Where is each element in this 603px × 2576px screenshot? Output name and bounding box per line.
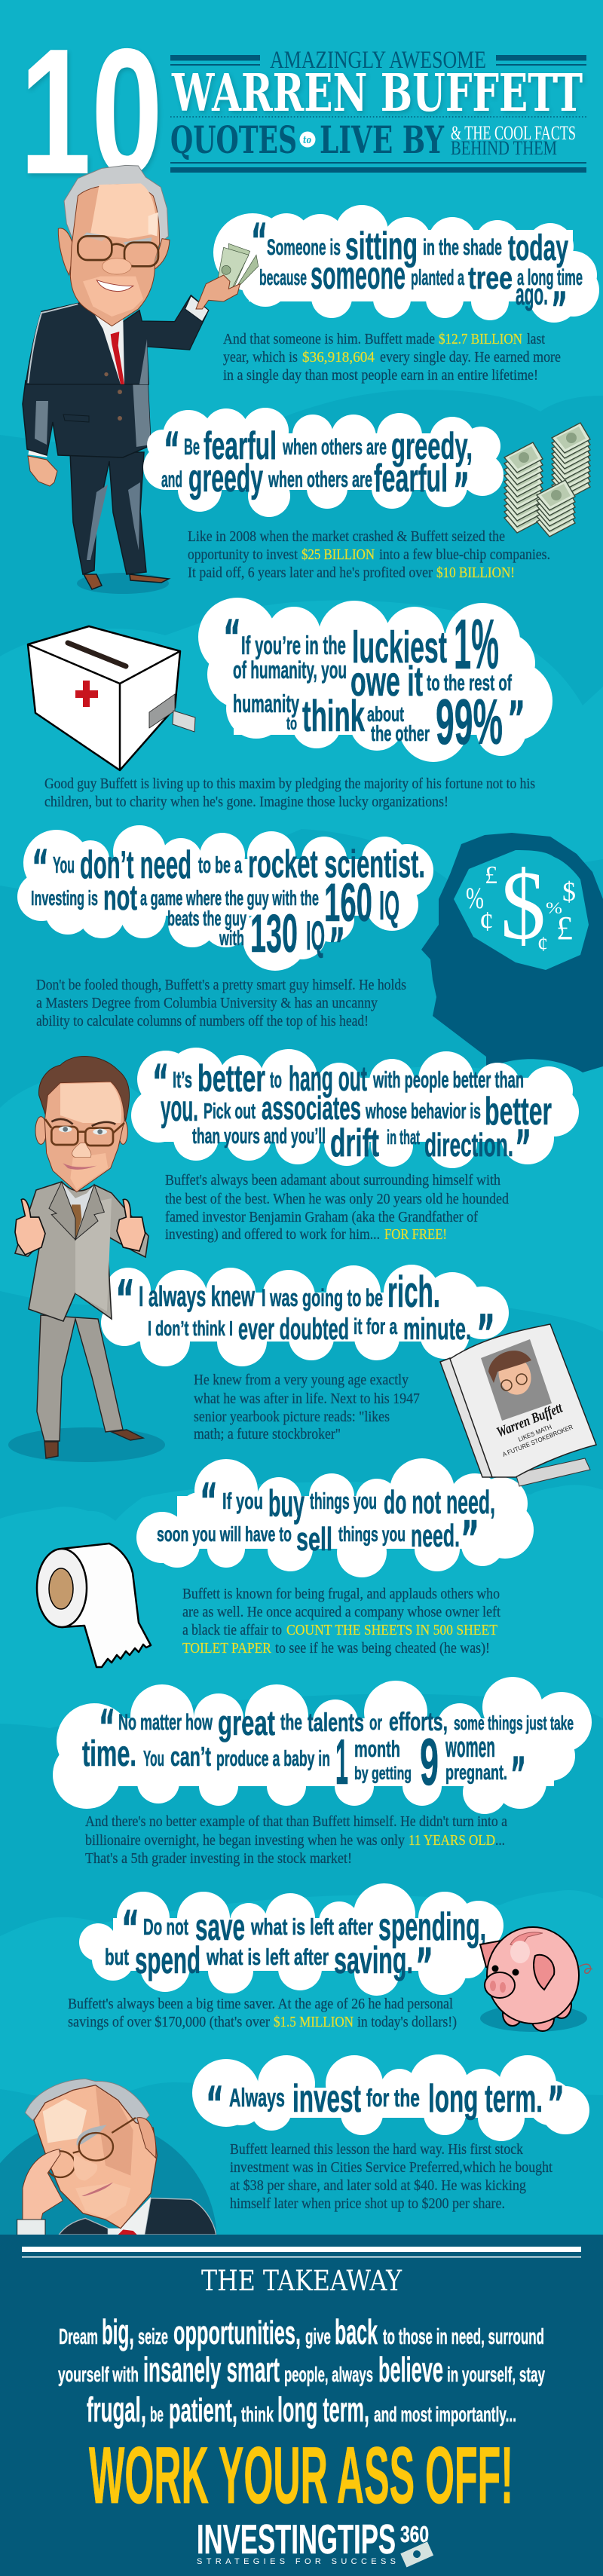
lower hand <box>28 456 57 486</box>
fact text <box>165 1173 509 1243</box>
speech cloud <box>136 1458 534 1577</box>
quote text: Investing is <box>31 886 98 910</box>
nose <box>103 259 131 274</box>
illustration: Warren Buffett standing with money <box>23 165 259 594</box>
summary text: long term, <box>277 2390 369 2429</box>
title block: LIVE BY <box>320 118 445 162</box>
summary text: frugal, <box>87 2390 146 2429</box>
ears <box>35 1117 47 1144</box>
quote text: ” <box>547 2076 565 2131</box>
nose and mouth <box>74 2154 97 2180</box>
quote text: It’s <box>173 1066 192 1093</box>
fact text: And there's no better example of that than Buffett himself. He didn't turn into a <box>85 1814 507 1830</box>
fact text: $10 BILLION! <box>436 565 515 581</box>
panel: quote 5 <box>131 1048 579 1243</box>
face <box>34 2085 157 2229</box>
fact text: Buffett is known for being frugal, and applauds others who <box>182 1586 500 1602</box>
fact text: It paid off, 6 years later and he's profited over <box>188 565 433 581</box>
summary text: back <box>335 2312 378 2351</box>
quote text: sell <box>296 1521 332 1558</box>
hair <box>64 165 168 246</box>
quote text: “ <box>99 1699 115 1755</box>
panel: quote 2 <box>143 408 590 581</box>
fact text: in today's dollars!) <box>357 2015 457 2030</box>
fact text: last <box>527 332 546 347</box>
quote text: associates <box>262 1090 361 1127</box>
fact text: children, but to charity when he's gone. Imagine those lucky organizations! <box>44 794 448 810</box>
quote text: the <box>280 1710 302 1735</box>
fact text <box>68 1996 457 2030</box>
speech cloud <box>192 2054 589 2141</box>
fact text <box>85 1814 507 1867</box>
face <box>70 185 160 326</box>
illustration: money stacks <box>504 423 590 537</box>
speech cloud <box>143 408 504 517</box>
jacket <box>15 1182 148 1321</box>
summary text: and most importantly... <box>374 2403 516 2426</box>
fact text: Don't be fooled though, Buffett's a pretty smart guy himself. He holds <box>36 977 406 993</box>
fact text: himself later when price shot up to $200 per share. <box>230 2196 505 2212</box>
quote text: than yours and you’ll <box>192 1124 326 1149</box>
illustration: head silhouette with currency symbols: $ <box>500 851 546 960</box>
panel: quote 3 <box>28 598 552 810</box>
summary text: people, always <box>284 2363 373 2386</box>
fact text: billionaire overnight, he began investing when he was only <box>85 1833 405 1849</box>
illustration: yearbook: LIKES MATH <box>517 1423 552 1443</box>
quote text: I don’t think I <box>148 1317 233 1340</box>
quote text: with <box>219 926 244 950</box>
fact text: famed investor Benjamin Graham (aka the Grandfather of <box>165 1210 478 1225</box>
glasses <box>45 1119 124 1146</box>
money <box>216 243 259 295</box>
fact text: 11 YEARS OLD <box>409 1833 495 1849</box>
speech cloud <box>198 598 552 762</box>
fact text: FOR FREE! <box>384 1227 447 1243</box>
fact text: ... <box>495 1833 505 1849</box>
quote text: “ <box>164 422 180 477</box>
quote text: 160 <box>324 873 372 933</box>
panel: quote 9 <box>68 1883 592 2032</box>
panel: quote 8 <box>53 1677 592 1867</box>
backdrop circle <box>0 2119 217 2365</box>
fact text: to see if he was being cheated (he was)! <box>275 1641 490 1657</box>
quote text: ” <box>461 1512 479 1568</box>
illustration: head silhouette with currency symbols: $ <box>562 877 576 907</box>
quote text: but <box>105 1944 129 1970</box>
logo: INVESTINGTIPS <box>197 2516 396 2562</box>
fact text: are as well. He once acquired a company whose owner left <box>182 1605 501 1620</box>
illustration: donation box <box>28 626 195 770</box>
quote text <box>157 1474 495 1568</box>
quote text: IQ <box>306 912 325 959</box>
glasses <box>46 2118 136 2177</box>
quote text: tree <box>468 260 513 295</box>
illustration: head silhouette with currency symbols: % <box>466 881 484 915</box>
quote text: a game where the guy with the <box>140 886 319 910</box>
quote text: planted a <box>411 266 464 290</box>
quote text: saving. <box>334 1939 413 1981</box>
quote text: If you’re in the <box>241 632 346 660</box>
fact text <box>182 1586 501 1657</box>
summary text: seize <box>138 2325 168 2349</box>
summary text: in yourself, stay <box>447 2363 545 2386</box>
floor shadow <box>77 573 169 594</box>
shirt and tie <box>62 1182 94 1219</box>
illustration: head silhouette with currency symbols: ¢ <box>479 906 494 938</box>
panel: quote 7 <box>37 1458 534 1667</box>
illustration: older Buffett thinking <box>0 2079 217 2365</box>
fact text <box>223 332 561 384</box>
logo: STRATEGIES FOR SUCCESS <box>197 2557 396 2566</box>
quote text: in that <box>387 1126 420 1149</box>
shirt and tie <box>108 2197 151 2235</box>
fact text: a black tie affair to <box>182 1623 282 1638</box>
quote text: rich. <box>387 1268 440 1317</box>
quote text: drift <box>330 1121 379 1165</box>
panel: quote 10 <box>0 2054 589 2365</box>
summary text <box>58 2312 545 2429</box>
jacket <box>59 2198 216 2235</box>
quote text: when others are <box>268 467 372 492</box>
quote text: efforts, <box>389 1708 448 1736</box>
lapels <box>49 1182 104 1240</box>
panel: header <box>20 12 586 212</box>
title block <box>170 47 586 173</box>
quote text: humanity <box>233 690 299 717</box>
quote text: great <box>218 1703 275 1742</box>
quote text: fearful <box>204 424 277 468</box>
illustration: piggy bank <box>480 1927 592 2032</box>
quote text: today <box>508 228 568 268</box>
fact text: $12.7 BILLION <box>439 332 522 347</box>
illustration: head silhouette with currency symbols: £ <box>556 910 573 947</box>
illustration: yearbook: A FUTURE STOKEBROKER <box>501 1423 574 1458</box>
hands <box>15 1199 145 1255</box>
panel: quote 6 <box>98 1265 509 1442</box>
quote text <box>223 604 525 758</box>
quote text: “ <box>152 1054 169 1109</box>
quote text: 130 <box>250 904 298 964</box>
title block: BEHIND THEM <box>451 137 557 159</box>
quote text: ” <box>415 1939 433 1995</box>
illustration: head silhouette with currency symbols: % <box>546 898 562 917</box>
panel: quote 1 <box>213 205 599 384</box>
fact text: That's a 5th grader investing in the stock market! <box>85 1851 352 1867</box>
quote text: of humanity, you <box>233 656 347 684</box>
quote text: save <box>195 1906 245 1948</box>
quote text: ” <box>453 463 470 518</box>
quote text: 1 <box>335 1727 348 1798</box>
face <box>44 1081 124 1192</box>
quote text: and <box>161 467 182 492</box>
quote text: better <box>197 1057 265 1100</box>
quote text: whose behavior is <box>365 1100 481 1124</box>
summary text: insanely smart <box>143 2350 280 2389</box>
fact text: senior yearbook picture reads: "likes <box>194 1409 390 1425</box>
quote text: invest <box>292 2077 361 2121</box>
quote text: you. <box>161 1089 198 1129</box>
quote text: in the shade <box>423 235 502 260</box>
hand and cuff <box>23 2149 63 2223</box>
fact text: Good guy Buffett is living up to this maxim by pledging the majority of his fortune not to his <box>44 776 535 792</box>
quote text: time. <box>82 1734 136 1774</box>
quote text: rocket scientist. <box>248 843 425 886</box>
quote text: IQ <box>379 882 399 929</box>
illustration: yearbook <box>440 1324 596 1486</box>
quote text: what is left after <box>206 1944 329 1970</box>
quote text: ever doubted <box>238 1313 349 1346</box>
quote text: “ <box>121 1901 139 1957</box>
fact text: into a few blue-chip companies. <box>379 547 550 563</box>
quote text: or <box>369 1711 382 1734</box>
quote text: about <box>367 702 404 726</box>
brows <box>43 2125 107 2158</box>
quote text: talents <box>308 1709 364 1737</box>
quote text: to <box>270 1066 282 1093</box>
panel: quote 4 <box>17 825 603 1072</box>
fact text: And that someone is him. Buffett made <box>223 332 435 347</box>
fact text <box>230 2142 553 2212</box>
quote text: to <box>286 714 297 734</box>
fact text: TOILET PAPER <box>182 1641 271 1657</box>
quote text: to be a <box>198 852 242 878</box>
speech cloud <box>213 205 599 323</box>
fact text: what he was after in life. Next to his 1947 <box>194 1391 420 1407</box>
quote text: to the rest of <box>427 671 513 696</box>
fact text: $36,918,604 <box>302 350 375 366</box>
quote text <box>82 1699 574 1802</box>
speech cloud <box>131 1048 579 1168</box>
speech cloud <box>17 825 433 971</box>
title block: QUOTES <box>170 118 297 162</box>
quote text: for the <box>366 2084 420 2112</box>
quote text <box>115 1268 495 1364</box>
quote text <box>161 422 473 518</box>
quote text: fearful <box>374 457 448 500</box>
quote text <box>251 213 583 337</box>
quote text: what is left after <box>250 1914 373 1940</box>
illustration: toilet paper roll <box>37 1543 151 1667</box>
ears <box>58 228 74 275</box>
jacket upper and arm <box>26 295 209 384</box>
fact text: every single day. He earned more <box>380 350 561 366</box>
quote text: ” <box>551 282 568 337</box>
quote text: ” <box>507 691 525 746</box>
fact text: $1.5 MILLION <box>274 2015 354 2030</box>
speech cloud <box>79 1883 504 1996</box>
nose <box>72 1143 91 1158</box>
illustration: head silhouette with currency symbols: £ <box>485 861 497 889</box>
summary text: opportunities, <box>173 2314 301 2351</box>
quote text: Pick out <box>204 1100 256 1124</box>
quote text: produce a baby in <box>216 1747 330 1771</box>
hair <box>25 2079 149 2133</box>
quote text: better <box>485 1090 552 1134</box>
quote text <box>31 840 425 973</box>
quote text: You <box>53 852 75 878</box>
trousers and shoes <box>37 1315 143 1458</box>
summary text: think <box>241 2403 274 2426</box>
quote text: soon you will have to <box>157 1522 292 1546</box>
glasses <box>78 236 112 260</box>
quote text: pregnant. <box>445 1761 507 1784</box>
quote text: it for a <box>354 1314 397 1339</box>
quote text: 9 <box>420 1724 439 1799</box>
quote text: “ <box>206 2076 224 2131</box>
fact text: COUNT THE SHEETS IN 500 SHEET <box>286 1623 497 1638</box>
fact text: Buffett learned this lesson the hard way. His first stock <box>230 2142 523 2158</box>
quote text: someone <box>311 254 406 298</box>
ear <box>137 2118 156 2158</box>
fact text: Buffet's always been adamant about surrounding himself with <box>165 1173 500 1189</box>
logo <box>197 2516 434 2568</box>
quote text: ” <box>476 1305 495 1364</box>
quote text: Someone is <box>267 235 341 260</box>
summary text: be <box>150 2403 164 2426</box>
quote text: You <box>143 1747 164 1771</box>
quote text: “ <box>200 1474 218 1530</box>
quote text: direction. <box>424 1127 513 1164</box>
speech cloud <box>53 1677 592 1814</box>
fact text: a Masters Degree from Columbia University & has an uncanny <box>36 996 378 1011</box>
quote text: ago. <box>516 278 548 311</box>
title block: AMAZINGLY AWESOME <box>270 47 486 74</box>
quote text: women <box>445 1732 495 1764</box>
quote text: owe it <box>350 657 423 705</box>
quote text: spending, <box>378 1905 486 1949</box>
heading: THE TAKEAWAY <box>201 2265 402 2297</box>
fact text <box>44 776 535 810</box>
quote text: greedy <box>188 457 263 500</box>
quote text: the other <box>371 722 430 746</box>
quote text: sitting <box>345 225 418 268</box>
fact text: investing) and offered to work for him... <box>165 1227 380 1243</box>
illustration: head silhouette with currency symbols <box>421 833 603 1072</box>
summary text: believe <box>378 2350 443 2389</box>
quote text: ” <box>510 1747 526 1802</box>
summary text: patient, <box>169 2392 237 2429</box>
quote text: buy <box>268 1482 305 1525</box>
floor shadow <box>8 1427 165 1462</box>
cuff and raised hand <box>185 296 209 322</box>
big number 10: 10 <box>20 12 163 212</box>
illustration: head silhouette with currency symbols: ¢ <box>537 933 548 956</box>
fact text: opportunity to invest <box>188 547 298 563</box>
quote text: when others are <box>282 435 387 460</box>
quote text: “ <box>32 840 49 895</box>
summary text: give <box>305 2325 331 2349</box>
quote text: “ <box>223 610 241 665</box>
quote text: can’t <box>170 1741 211 1772</box>
fact text: savings of over $170,000 (that's over <box>68 2015 270 2030</box>
fact text: He knew from a very young age exactly <box>194 1372 409 1388</box>
panel: the takeaway <box>0 2235 603 2576</box>
quote text: things you <box>310 1488 377 1514</box>
quote text: don’t need <box>80 843 191 887</box>
quote text <box>152 1054 552 1175</box>
title block: to <box>303 135 311 146</box>
quote text <box>206 2076 565 2131</box>
quote text <box>105 1901 486 1995</box>
quote text: minute. <box>403 1311 471 1346</box>
fact text: $25 BILLION <box>302 547 375 563</box>
fact text <box>36 977 406 1029</box>
quote text: I always knew <box>139 1281 255 1313</box>
summary text: big, <box>102 2312 134 2351</box>
logo: 360 <box>400 2521 429 2547</box>
quote text: do not need, <box>384 1484 495 1521</box>
quote text: Do not <box>143 1914 188 1940</box>
quote text: ” <box>515 1120 531 1175</box>
quote text: Be <box>184 433 200 460</box>
fact text: Buffett's always been a big time saver. At the age of 26 he had personal <box>68 1996 454 2012</box>
quote text: not <box>103 877 137 917</box>
quote text: beats the guy <box>167 907 246 930</box>
quote text: 1% <box>454 604 499 684</box>
quote text: 99% <box>436 687 503 758</box>
fact text <box>194 1372 420 1442</box>
quote text: ” <box>329 918 345 973</box>
quote text: No matter how <box>118 1710 213 1735</box>
quote text: spend <box>135 1939 200 1981</box>
quote text: think <box>302 692 365 741</box>
quote text: need. <box>411 1518 460 1553</box>
quote text: greedy, <box>391 425 473 467</box>
quote text: by getting <box>354 1764 412 1784</box>
jacket lower <box>23 381 151 457</box>
quote text: month <box>354 1736 400 1762</box>
quote text: hang out <box>289 1059 367 1098</box>
fact text: year, which is <box>223 350 298 366</box>
illustration: young Warren Buffett thumbs up <box>8 1057 165 1462</box>
quote text: because <box>259 266 307 290</box>
trousers and shoes <box>70 452 169 589</box>
fact text: at $38 per share, and later sold at $40. He was kicking <box>230 2178 526 2194</box>
quote text: Always <box>229 2084 285 2113</box>
quote text: things you <box>338 1522 406 1546</box>
fact text: Like in 2008 when the market crashed & Buffett seized the <box>188 529 505 545</box>
quote text: “ <box>251 213 268 268</box>
quote text: luckiest <box>352 623 447 672</box>
fact text: math; a future stockbroker" <box>194 1427 341 1442</box>
summary text: yourself with <box>58 2363 139 2386</box>
fact text: the best of the best. When he was only 20 years old he hounded <box>165 1192 509 1207</box>
speech cloud <box>98 1265 509 1366</box>
summary text: Dream <box>59 2325 98 2349</box>
hair <box>39 1057 130 1121</box>
fact text <box>188 529 550 581</box>
illustration: yearbook: Warren Buffett <box>494 1400 565 1441</box>
quote text: I was going to be <box>262 1284 383 1311</box>
fact text: ability to calculate columns of numbers off the top of his head! <box>36 1014 369 1029</box>
quote text: If you <box>222 1488 263 1514</box>
fact text: in a single day than most people earn in an entire lifetime! <box>223 368 538 384</box>
quote text: “ <box>115 1270 135 1329</box>
fact text: investment was in Cities Service Preferred,which he bought <box>230 2160 553 2176</box>
